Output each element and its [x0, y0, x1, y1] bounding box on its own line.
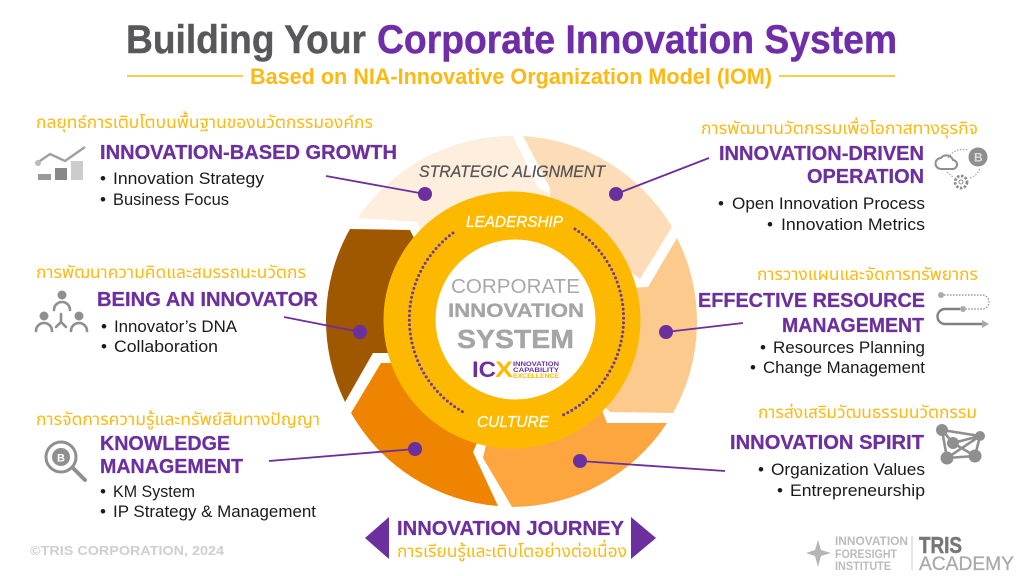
- panel: effective resource management: Resources Planning: [773, 338, 925, 357]
- label: culture: CULTURE: [477, 414, 549, 431]
- panel: being an innovator: •: [101, 317, 107, 336]
- panel: innovation spirit: INNOVATION SPIRIT: [730, 432, 924, 454]
- icon: people: [36, 290, 87, 331]
- dotted arc left: [409, 233, 463, 412]
- connector: resource: [659, 323, 743, 339]
- panel: being an innovator: [36, 264, 319, 356]
- segment: innovator: [326, 229, 430, 402]
- centre heading: INNOVATION: [448, 301, 584, 322]
- cycle diagram: [326, 136, 697, 507]
- ICX logo: [472, 357, 560, 382]
- dotted arc right: [561, 229, 624, 416]
- panel: effective resource management: Change Management: [763, 358, 925, 377]
- segment: resource: [570, 238, 697, 413]
- panel: innovation spirit: •: [777, 481, 783, 500]
- label: leadership: LEADERSHIP: [466, 214, 563, 231]
- logo: tris academy: [912, 532, 1014, 575]
- panel: knowledge management: •: [100, 502, 106, 521]
- panel: being an innovator: การพัฒนาความคิดและสมรรถนะนวัตกร: [36, 264, 306, 282]
- panel: knowledge management: การจัดการความรู้และทรัพย์สินทางปัญญา: [36, 411, 320, 429]
- panel: innovation spirit: Organization Values: [771, 460, 925, 479]
- icon: growth chart: [35, 147, 85, 180]
- icon: magnifier: [46, 442, 85, 480]
- title: Building Your: [126, 18, 366, 62]
- panel: innovation-driven operation: [701, 117, 988, 234]
- panel: knowledge management: MANAGEMENT: [100, 456, 243, 478]
- panel: innovation-driven operation: •: [767, 215, 773, 234]
- panel: effective resource management: EFFECTIVE RESOURCE: [698, 290, 925, 312]
- panel: effective resource management: MANAGEMENT: [782, 315, 924, 337]
- arrow: right: [631, 517, 656, 559]
- panel: innovation spirit: การส่งเสริมวัฒนธรรมนวัตกรรม: [758, 404, 977, 422]
- ICX logo: IC: [472, 357, 496, 382]
- connector: knowledge: [269, 442, 422, 461]
- yellow ring: [384, 192, 640, 448]
- white centre: [436, 240, 596, 400]
- panel: innovation-based growth: [35, 111, 397, 209]
- panel: knowledge management: KNOWLEDGE: [100, 433, 230, 455]
- panel: effective resource management: [698, 266, 989, 377]
- panel: knowledge management: •: [100, 482, 106, 501]
- panel: effective resource management: การวางแผนและจัดการทรัพยากร: [757, 266, 978, 284]
- panel: innovation-driven operation: Open Innovation Process: [732, 194, 925, 213]
- segment: strategic growth: [358, 136, 549, 250]
- arrow: left: [365, 517, 389, 559]
- connector: innovator: [284, 317, 367, 339]
- panel: being an innovator: Innovator’s DNA: [114, 317, 238, 336]
- panel: innovation-driven operation: OPERATION: [807, 166, 924, 188]
- panel: innovation spirit: •: [758, 460, 764, 479]
- panel: being an innovator: BEING AN INNOVATOR: [97, 289, 319, 311]
- segment: knowledge: [351, 363, 498, 506]
- copyright: ©TRIS CORPORATION, 2024: [30, 543, 225, 558]
- connector: operation: [609, 158, 709, 201]
- panel: effective resource management: •: [750, 358, 756, 377]
- innovation journey banner: การเรียนรู้และเติบโตอย่างต่อเนื่อง: [397, 539, 627, 563]
- panel: innovation-driven operation: INNOVATION-DRIVEN: [719, 143, 924, 165]
- panel: knowledge management: IP Strategy & Management: [113, 502, 316, 521]
- logo: tris academy: ACADEMY: [919, 554, 1014, 575]
- title: [126, 18, 897, 62]
- panel: innovation spirit: [730, 404, 985, 500]
- ICX logo: EXCELLENCE: [513, 373, 560, 380]
- panel: innovation-based growth: •: [100, 190, 106, 209]
- logo: innovation foresight institute: [806, 534, 908, 573]
- panel: innovation-driven operation: •: [718, 194, 724, 213]
- panel: knowledge management: KM System: [113, 482, 195, 501]
- segment: operation: [523, 136, 672, 280]
- ICX logo: INNOVATION: [513, 361, 559, 368]
- centre heading: [448, 276, 584, 354]
- panel: knowledge management: [36, 411, 320, 521]
- panel: innovation-based growth: Business Focus: [113, 190, 229, 209]
- innovation journey banner: [365, 517, 656, 563]
- icon: network: [936, 424, 985, 464]
- icon: path route: [938, 292, 989, 328]
- panel: innovation-based growth: Innovation Strategy: [113, 169, 265, 188]
- innovation journey banner: INNOVATION JOURNEY: [397, 517, 624, 540]
- logo: innovation foresight institute: INSTITUTE: [835, 559, 891, 573]
- logo: tris academy: TRIS: [919, 532, 962, 558]
- panel: innovation-based growth: •: [100, 169, 106, 188]
- centre heading: SYSTEM: [457, 324, 574, 354]
- panel: innovation-driven operation: การพัฒนานวัตกรรมเพื่อโอกาสทางธุรกิจ: [701, 117, 978, 138]
- panel: innovation-based growth: กลยุทธ์การเติบโตบนพื้นฐานของนวัตกรรมองค์กร: [36, 111, 373, 132]
- ICX logo: CAPABILITY: [513, 367, 560, 374]
- label: strategic alignment: STRATEGIC ALIGNMENT: [419, 163, 607, 181]
- panel: effective resource management: •: [760, 338, 766, 357]
- centre heading: CORPORATE: [451, 276, 580, 298]
- title: Corporate Innovation System: [377, 18, 897, 62]
- panel: innovation-based growth: INNOVATION-BASED GROWTH: [100, 142, 397, 164]
- icon: cloud, coin, gear: [936, 148, 988, 188]
- subtitle: Based on NIA-Innovative Organization Model (IOM): [250, 64, 772, 89]
- logo: innovation foresight institute: FORESIGHT: [835, 547, 898, 561]
- panel: being an innovator: •: [101, 337, 107, 356]
- segment: spirit: [483, 400, 667, 507]
- icon: magnifier: B: [57, 452, 65, 464]
- ICX logo: X: [495, 357, 513, 382]
- logo: innovation foresight institute: INNOVATION: [835, 534, 908, 548]
- connector: growth: [326, 176, 432, 201]
- panel: being an innovator: Collaboration: [114, 337, 218, 356]
- icon: cloud, coin, gear: B: [974, 150, 983, 164]
- connector: spirit: [573, 454, 725, 471]
- panel: innovation spirit: Entrepreneurship: [790, 481, 925, 500]
- panel: innovation-driven operation: Innovation Metrics: [781, 215, 925, 234]
